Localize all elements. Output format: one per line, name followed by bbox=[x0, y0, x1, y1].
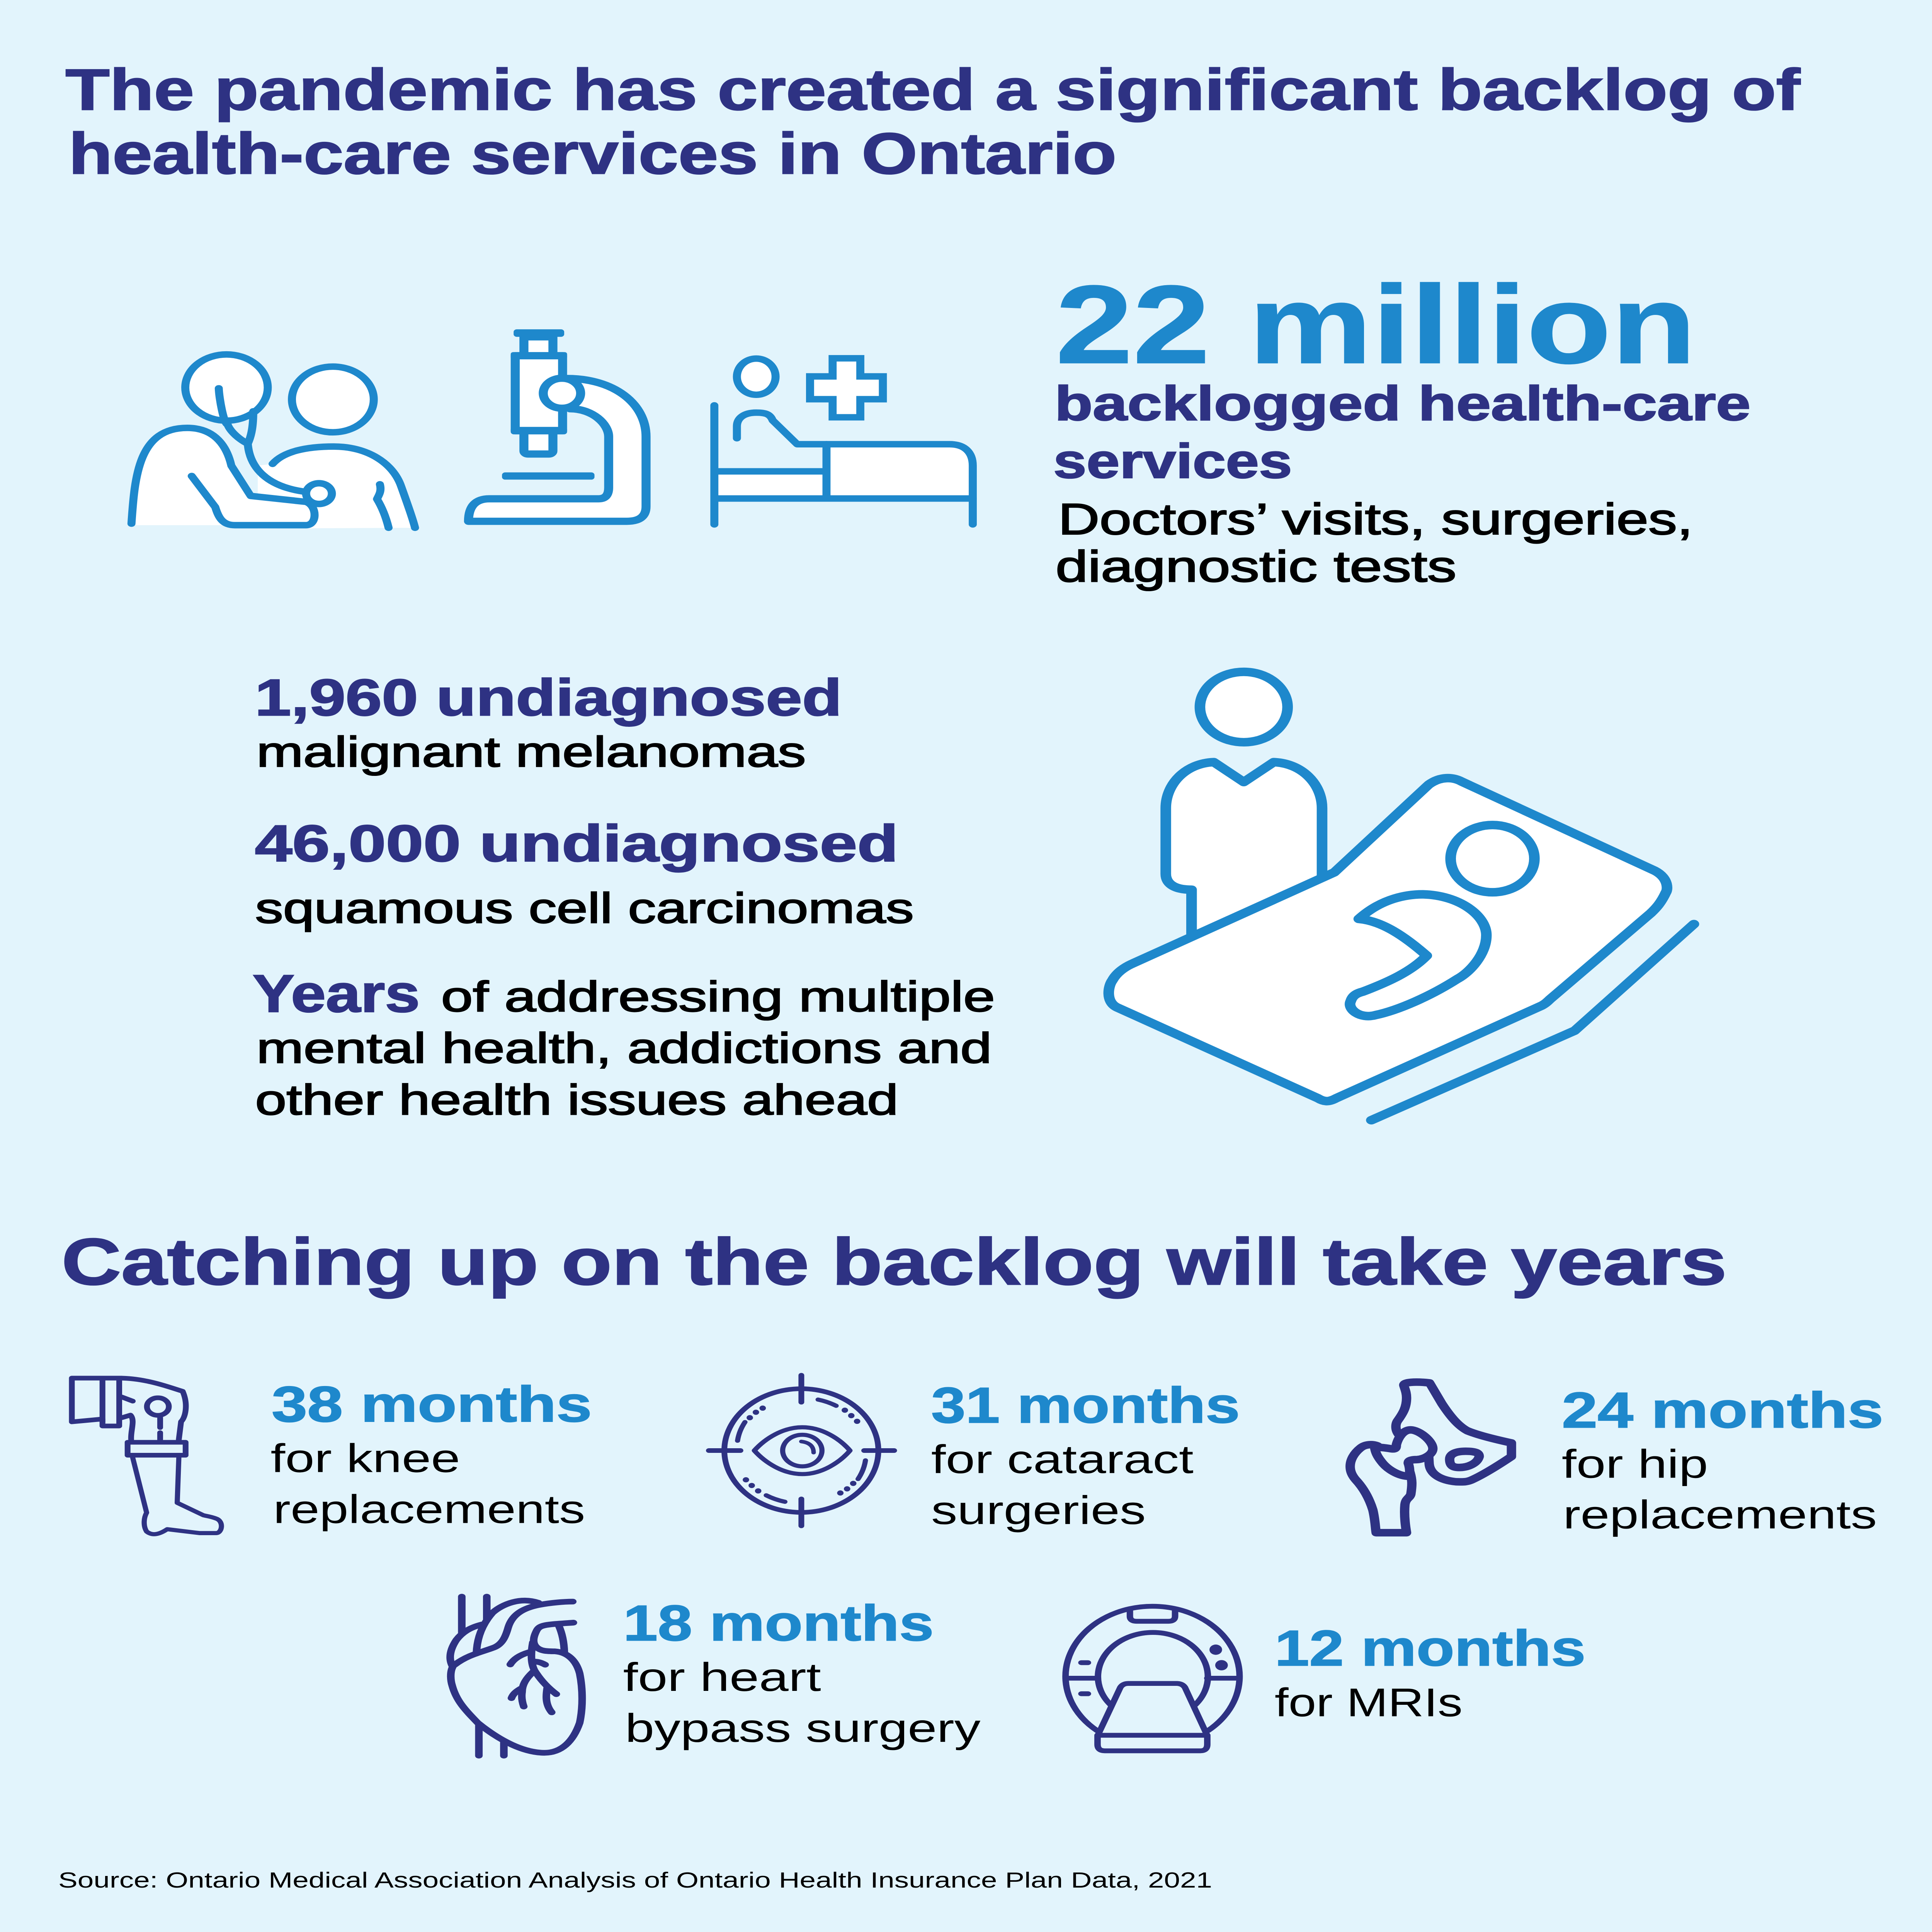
carcinomas stat: squamous cell carcinomas bbox=[255, 884, 914, 932]
icon: knee bbox=[72, 1378, 221, 1534]
icon: doctor examining patient with stethoscope bbox=[131, 354, 415, 529]
label: 24 months: 24 months bbox=[1562, 1383, 1883, 1439]
description bbox=[623, 1655, 981, 1750]
icon: heart bbox=[450, 1597, 582, 1756]
stat detail: diagnostic tests bbox=[1056, 542, 1456, 591]
title bbox=[65, 57, 1800, 186]
icon: doctor beside patient on bed bbox=[1109, 672, 1694, 1120]
stat description bbox=[1053, 376, 1751, 488]
icon: patient in bed with medical cross bbox=[714, 358, 973, 524]
melanomas stat: 1,960 undiagnosed bbox=[255, 669, 842, 726]
years of issues stat: of addressing multiple bbox=[441, 973, 995, 1020]
item: MRIs bbox=[1066, 1606, 1586, 1751]
description: bypass surgery bbox=[625, 1706, 981, 1750]
item: cataract surgeries bbox=[709, 1375, 1240, 1532]
description: surgeries bbox=[931, 1488, 1146, 1532]
item: hip replacements bbox=[1350, 1382, 1883, 1537]
icon: MRI machine bbox=[1066, 1606, 1240, 1751]
stat list: undiagnosed conditions bbox=[253, 669, 995, 1124]
years of issues stat bbox=[253, 964, 995, 1124]
carcinomas stat bbox=[255, 815, 914, 932]
description: for heart bbox=[623, 1655, 821, 1699]
section heading: Catching up on the backlog will take years bbox=[61, 1225, 1727, 1298]
description bbox=[1562, 1441, 1877, 1537]
title: The pandemic has created a significant backlog of bbox=[65, 57, 1800, 122]
label: 12 months: 12 months bbox=[1275, 1621, 1586, 1677]
description: for cataract bbox=[931, 1437, 1194, 1481]
melanomas stat bbox=[255, 669, 842, 776]
item: knee replacements bbox=[72, 1376, 592, 1534]
icon: eye with crosshair bbox=[709, 1375, 894, 1526]
description: for hip bbox=[1562, 1441, 1708, 1486]
carcinomas stat: 46,000 undiagnosed bbox=[255, 815, 898, 872]
description: replacements bbox=[273, 1487, 585, 1532]
stat detail: Doctors’ visits, surgeries, bbox=[1058, 495, 1693, 544]
stat description: services bbox=[1053, 434, 1292, 488]
icon: hip joint bbox=[1350, 1382, 1512, 1533]
years of issues stat: other health issues ahead bbox=[255, 1076, 898, 1124]
item: heart bypass surgery bbox=[450, 1595, 981, 1756]
label: 38 months: 38 months bbox=[272, 1376, 592, 1432]
label: 31 months: 31 months bbox=[931, 1378, 1240, 1434]
description bbox=[931, 1437, 1194, 1532]
description: replacements bbox=[1563, 1492, 1877, 1537]
years of issues stat: mental health, addictions and bbox=[257, 1024, 992, 1072]
stat detail bbox=[1056, 495, 1693, 591]
big stat: 22 million bbox=[1053, 262, 1751, 591]
icon: microscope bbox=[468, 329, 646, 521]
description: for MRIs bbox=[1275, 1680, 1463, 1725]
description bbox=[270, 1436, 585, 1532]
melanomas stat: malignant melanomas bbox=[257, 728, 806, 776]
years of issues stat: Years bbox=[253, 964, 420, 1023]
description: for knee bbox=[270, 1436, 460, 1481]
label: 18 months: 18 months bbox=[623, 1595, 934, 1651]
stat description: backlogged health-care bbox=[1054, 376, 1751, 431]
title: health-care services in Ontario bbox=[69, 121, 1116, 186]
big stat: 22 million: 22 million bbox=[1056, 262, 1696, 386]
source note: Source: Ontario Medical Association Analysis of Ontario Health Insurance Plan Data, 2021 bbox=[58, 1867, 1212, 1892]
